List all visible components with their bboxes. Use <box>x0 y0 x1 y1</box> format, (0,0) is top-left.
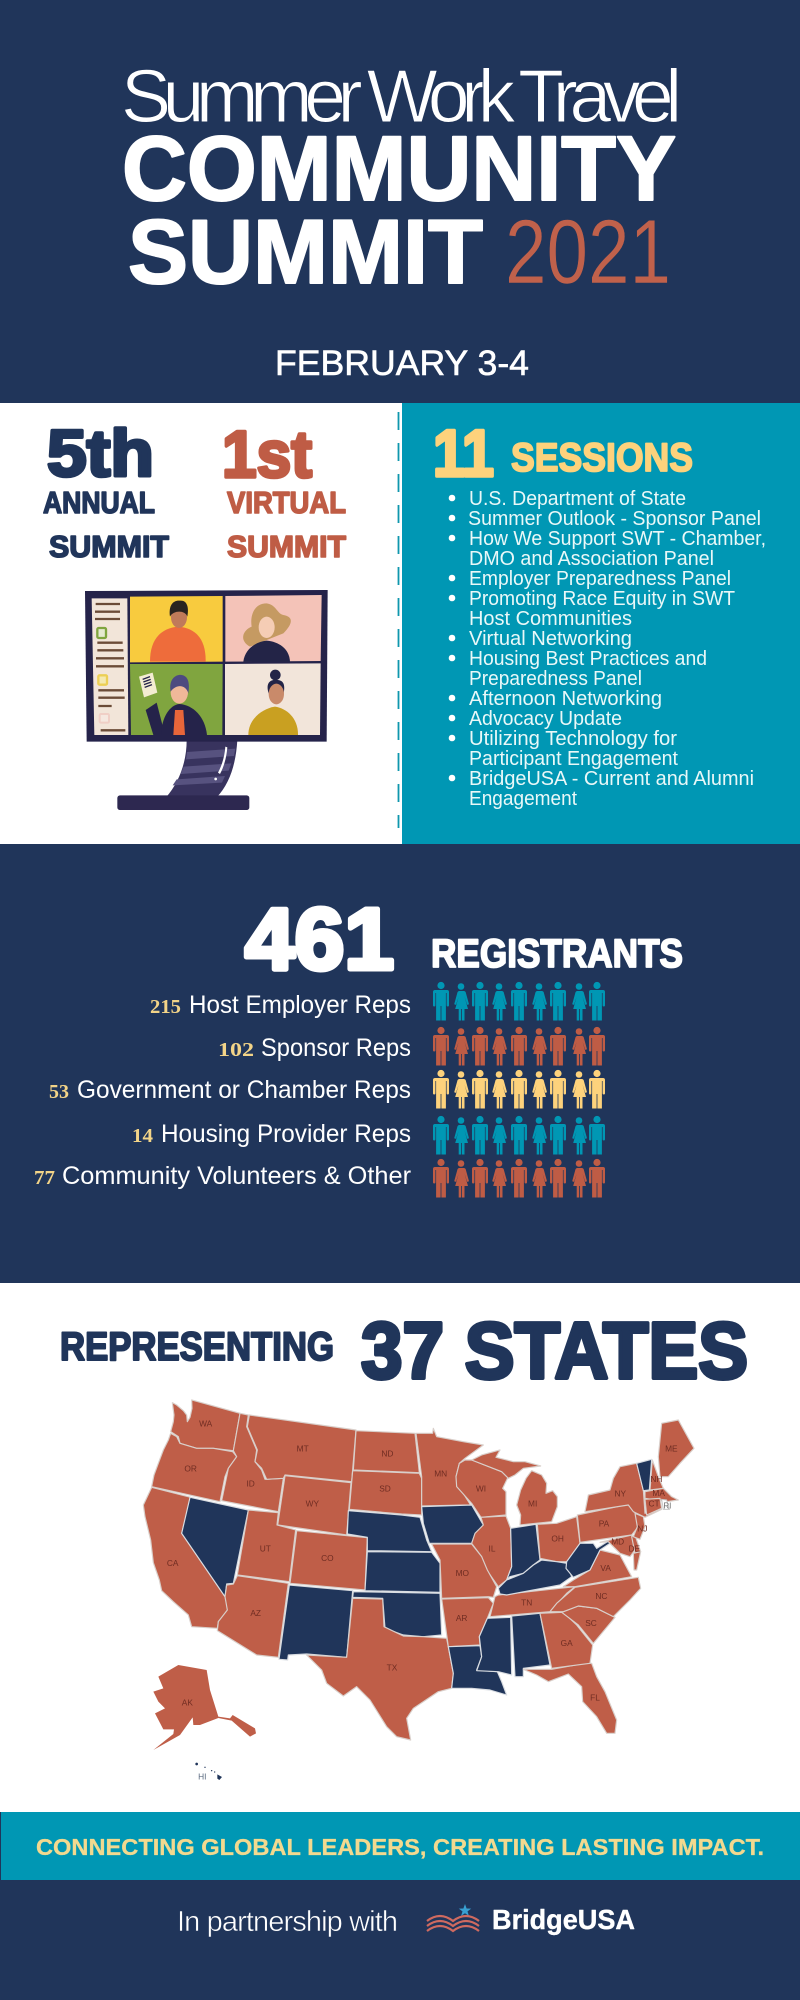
partnership line <box>177 1904 635 1938</box>
row: housing provider reps <box>132 1116 605 1154</box>
heading: 11 sessions <box>433 416 693 490</box>
session list: Utilizing Technology for <box>469 728 677 750</box>
panel: summit facts <box>0 403 402 844</box>
map west: CA <box>167 1558 179 1568</box>
session list: Host Communities <box>469 608 632 630</box>
map west: OR <box>184 1464 197 1474</box>
stat: 461 registrants <box>245 891 683 988</box>
row: housing provider reps: Housing Provider Reps <box>161 1120 411 1148</box>
row: sponsor reps: Sponsor Reps <box>261 1034 411 1062</box>
row: government or chamber reps: Government or Chamber Reps <box>77 1076 411 1104</box>
map east: PA <box>599 1518 610 1528</box>
row: host employer reps: Host Employer Reps <box>189 991 411 1019</box>
stat: 1st virtual summit: SUMMIT <box>227 529 346 564</box>
map east: NH <box>650 1474 662 1484</box>
map west: WA <box>199 1419 213 1429</box>
row: community volunteers and other: 77 <box>34 1167 55 1189</box>
session list: Preparedness Panel <box>469 668 642 690</box>
row: host employer reps: 215 <box>150 996 181 1018</box>
stat: 1st virtual summit: 1st <box>222 417 312 491</box>
map east: GA <box>561 1638 573 1648</box>
map east: TN <box>521 1598 532 1608</box>
map west: AK <box>182 1697 193 1707</box>
title line: COMMUNITY: COMMUNITY <box>122 118 676 220</box>
banner: tagline <box>1 1812 800 1880</box>
session list <box>449 488 766 810</box>
banner: tagline: CONNECTING GLOBAL LEADERS, CREATING LASTING IMPACT. <box>36 1834 764 1860</box>
row: host employer reps <box>150 982 605 1020</box>
session list: BridgeUSA - Current and Alumni <box>469 768 754 790</box>
map east: MD <box>611 1536 624 1546</box>
map west: HI <box>198 1772 207 1782</box>
map west: ID <box>246 1479 255 1489</box>
person: long hair <box>243 603 291 662</box>
row: government or chamber reps <box>49 1070 605 1108</box>
map west: TX <box>387 1662 398 1672</box>
title line: SUMMIT: SUMMIT <box>128 202 483 303</box>
map east: CT <box>648 1498 660 1508</box>
map west: SD <box>379 1484 391 1494</box>
panel: states <box>0 1283 800 1812</box>
map west: CO <box>321 1553 334 1563</box>
map west: ND <box>381 1448 393 1458</box>
stat: 1st virtual summit: VIRTUAL <box>227 485 346 520</box>
date: February 3-4: FEBRUARY 3-4 <box>275 344 529 383</box>
row: sponsor reps: 102 <box>218 1039 254 1061</box>
heading: 11 sessions: SESSIONS <box>511 436 693 480</box>
title line: Summer Work Travel: Summer Work Travel <box>121 54 682 138</box>
person: orange sweater <box>150 601 206 662</box>
logo wordmark: BridgeUSA: BridgeUSA <box>492 1904 635 1935</box>
session list: Advocacy Update <box>469 708 622 730</box>
row: community volunteers and other <box>34 1159 605 1198</box>
map west: MT <box>297 1444 309 1454</box>
map east: VA <box>600 1563 611 1573</box>
person: holding paper <box>139 673 207 735</box>
map east: OH <box>551 1533 564 1543</box>
session list: U.S. Department of State <box>469 488 686 510</box>
map east <box>416 1420 694 1733</box>
text: in partnership with: In partnership with <box>177 1906 398 1938</box>
divider: dashed line <box>398 412 400 828</box>
map: United States <box>143 1400 694 1782</box>
map east: DE <box>629 1543 641 1553</box>
logo mark: BridgeUSA <box>427 1904 479 1931</box>
row: housing provider reps: 14 <box>132 1125 153 1147</box>
stat: 461 registrants: REGISTRANTS <box>431 932 683 976</box>
map east: MN <box>434 1469 447 1479</box>
map east: RI <box>663 1502 671 1511</box>
session list: Engagement <box>469 788 577 810</box>
stat: 5th annual summit: ANNUAL <box>43 485 155 520</box>
map west: AZ <box>250 1608 261 1618</box>
panel: registrants <box>34 891 683 1198</box>
map east: MA <box>652 1488 665 1498</box>
stat: 5th annual summit: 5th <box>47 416 154 490</box>
map east: NJ <box>637 1524 647 1534</box>
map west <box>143 1400 453 1782</box>
session list: How We Support SWT - Chamber, <box>469 528 766 550</box>
row: government or chamber reps: 53 <box>49 1081 69 1103</box>
icon: video call monitor <box>85 590 328 810</box>
stat: 5th annual summit: SUMMIT <box>49 529 169 564</box>
title year: 2021: 2021 <box>505 202 671 303</box>
map east: AR <box>456 1613 467 1623</box>
map east: SC <box>585 1618 597 1628</box>
map east: MI <box>528 1499 537 1509</box>
stat: 5th annual summit <box>43 416 169 564</box>
stat: 461 registrants: 461 <box>245 891 394 988</box>
session list: DMO and Association Panel <box>469 548 714 570</box>
heading: 11 sessions: 11 <box>433 416 494 490</box>
map east: NY <box>615 1488 627 1498</box>
map east: FL <box>590 1693 600 1703</box>
map east: WI <box>476 1483 486 1493</box>
stat: 1st virtual summit <box>222 417 346 564</box>
session list: Participant Engagement <box>469 748 678 770</box>
session list: Afternoon Networking <box>469 688 662 710</box>
map east: NC <box>595 1591 607 1601</box>
heading: representing 37 states: 37 STATES <box>361 1306 748 1395</box>
row: sponsor reps <box>218 1027 605 1066</box>
session list: Summer Outlook - Sponsor Panel <box>468 508 761 530</box>
person: hair bun <box>248 670 298 735</box>
map east: MO <box>456 1568 470 1578</box>
heading: representing 37 states <box>60 1306 748 1395</box>
heading: representing 37 states: REPRESENTING <box>60 1325 334 1369</box>
map east: IL <box>489 1543 496 1553</box>
map west: UT <box>260 1543 271 1553</box>
map east: ME <box>665 1444 678 1454</box>
map west: WY <box>306 1498 319 1508</box>
session list: Housing Best Practices and <box>469 648 707 670</box>
row: community volunteers and other: Community Volunteers & Other <box>62 1162 411 1190</box>
title block <box>121 54 682 303</box>
panel: sessions <box>402 403 800 844</box>
session list: Employer Preparedness Panel <box>469 568 731 590</box>
session list: Promoting Race Equity in SWT <box>469 588 735 610</box>
session list: Virtual Networking <box>469 628 632 650</box>
